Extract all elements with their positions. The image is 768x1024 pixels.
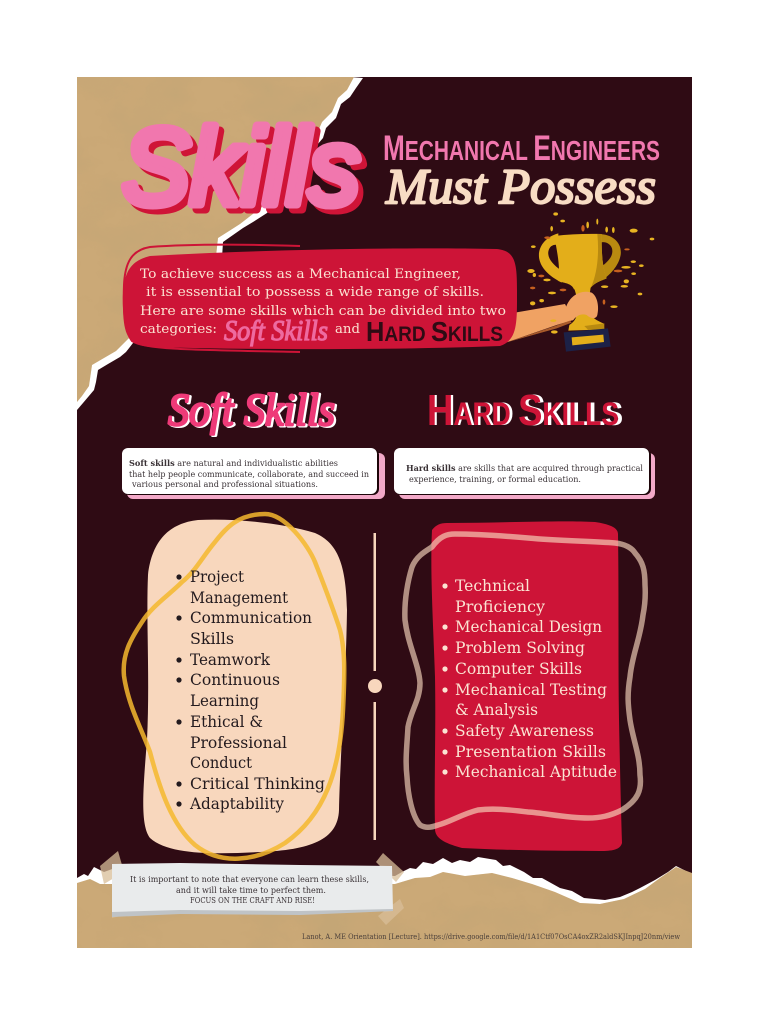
bullet list: Computer Skills — [455, 660, 582, 678]
note text: and it will take time to perfect them. — [176, 886, 326, 896]
pale outline — [405, 534, 645, 827]
peach blob — [143, 520, 347, 853]
note text: FOCUS ON THE CRAFT AND RISE! — [190, 896, 315, 906]
definition text: various personal and professional situations. — [131, 480, 318, 489]
intro text: and — [335, 322, 360, 337]
note text — [130, 875, 369, 906]
bullet list: Management — [190, 589, 289, 607]
inline label: Hard Skills: HARD SKILLS — [366, 316, 503, 347]
inline label: Soft Skills: Soft Skills — [224, 316, 328, 347]
bullet list: Skills — [190, 630, 234, 648]
red blob — [431, 521, 622, 851]
note text: It is important to note that everyone can learn these skills, — [130, 875, 369, 885]
definition text: experience, training, or formal education. — [409, 475, 581, 484]
bullet list: Ethical & — [190, 713, 263, 731]
intro text: To achieve success as a Mechanical Engineer, — [140, 267, 461, 282]
intro text: categories: — [140, 322, 217, 337]
bullet list: Technical — [455, 577, 530, 595]
panel: soft skills definition — [122, 448, 385, 499]
bullet list: Teamwork — [190, 651, 271, 669]
heading: Soft Skills: Soft Skills — [170, 385, 337, 436]
intro callout — [123, 245, 517, 352]
icon: hand holding trophy — [507, 212, 654, 352]
bullet list: Project — [190, 568, 245, 586]
title: Mechanical Engineers: MECHANICAL ENGINEERS — [383, 129, 660, 168]
bullet list: Mechanical Design — [455, 618, 602, 636]
bullet list: Proficiency — [455, 598, 545, 616]
bullet list: Mechanical Aptitude — [455, 763, 617, 781]
bullet list: Presentation Skills — [455, 743, 606, 761]
bullet list: Conduct — [190, 754, 253, 772]
heading: Hard Skills: HARD SKILLS — [427, 386, 619, 435]
definition text — [129, 458, 369, 489]
panel: soft skills list — [124, 514, 347, 859]
panel: hard skills list — [405, 521, 645, 851]
bullet list: Professional — [190, 734, 287, 752]
definition text: Soft skills are natural and individualistic abilities — [129, 458, 338, 468]
intro text: it is essential to possess a wide range of skills. — [146, 285, 484, 300]
bullet list: Adaptability — [189, 795, 284, 813]
bullet list: Critical Thinking — [190, 775, 325, 793]
bullet list: Problem Solving — [455, 639, 585, 657]
heading: Soft Skills: Soft Skills — [168, 384, 335, 435]
bullet list — [442, 577, 617, 781]
torn paper: bottom — [77, 857, 692, 948]
bullet list: & Analysis — [455, 701, 538, 719]
poster background — [77, 77, 692, 948]
bullet list: Continuous — [190, 671, 280, 689]
panel: hard skills definition — [394, 448, 655, 499]
bullet list — [176, 568, 325, 813]
bullet list: Learning — [190, 692, 259, 710]
intro text: Here are some skills which can be divided into two — [140, 304, 506, 319]
bullet list: Mechanical Testing — [455, 681, 607, 699]
note: taped paper — [100, 851, 404, 925]
title: Skills: Skills — [122, 106, 360, 227]
tape pieces — [100, 851, 404, 925]
title: Skills: Skills — [127, 111, 365, 232]
definition text: that help people communicate, collaborate, and succeed in — [129, 470, 369, 479]
bullet list: Communication — [190, 609, 312, 627]
citation: Lanot, A. ME Orientation [Lecture]. https://drive.google.com/file/d/1A1Ctf07OsCA4oxZR2aldSKJInpqJ20nm/view — [302, 932, 681, 941]
intro text — [140, 267, 506, 337]
definition text: Hard skills are skills that are acquired through practical — [406, 463, 643, 473]
title: Must Possess: Must Possess — [385, 158, 656, 214]
torn paper: top left — [77, 77, 363, 410]
bullet list: Safety Awareness — [455, 722, 594, 740]
heading: Hard Skills: HARD SKILLS — [429, 386, 623, 435]
center divider — [368, 533, 382, 840]
yellow outline — [124, 514, 344, 859]
definition text — [406, 463, 643, 484]
